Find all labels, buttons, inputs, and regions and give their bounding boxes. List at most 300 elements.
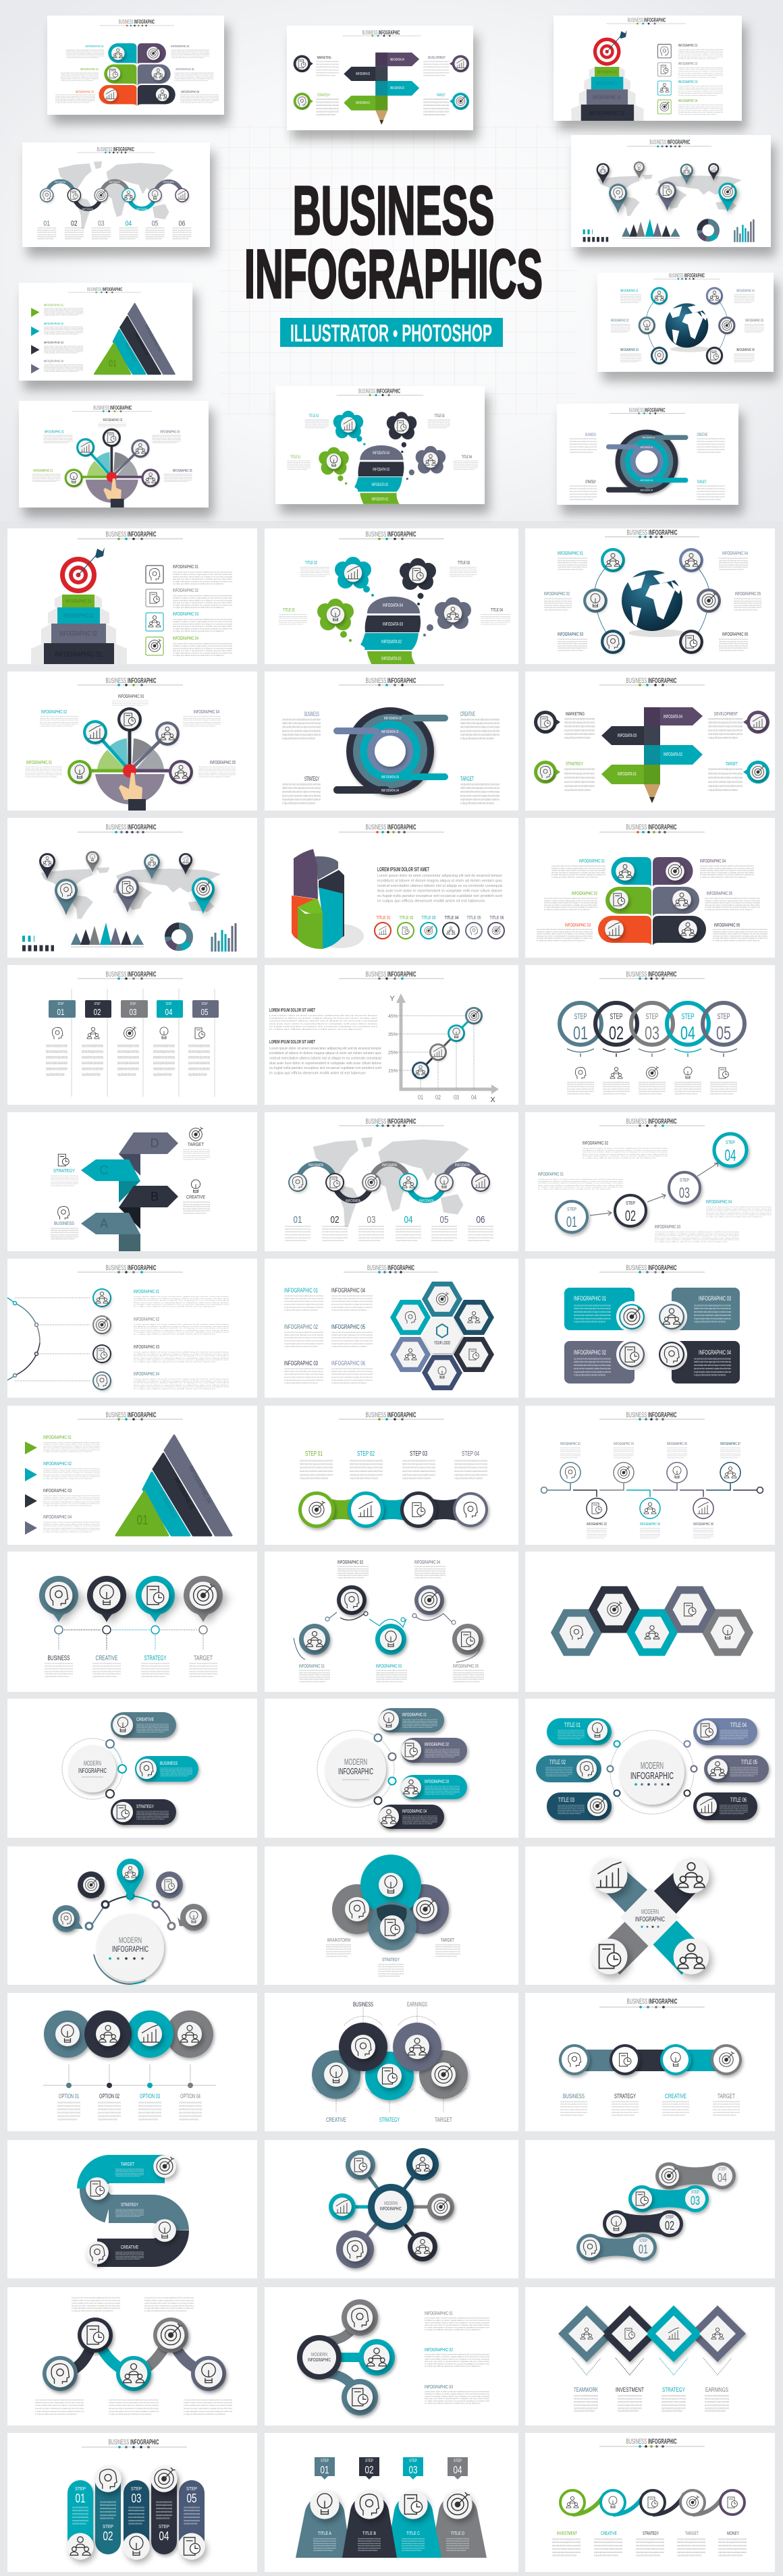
bell text: TITLE C [406,2531,420,2536]
text blocks: CREATIVE [665,2093,686,2100]
pyramid layers: INFOGRAPHIC 03 [173,1477,195,1510]
panel: world wave [265,1112,518,1251]
pills: BUSINESS [160,1761,178,1766]
heading [78,1411,183,1421]
pencil arrows: INFODATA 01 [618,772,637,777]
heading [339,823,444,833]
text blocks: INFOGRAPHIC 04 [43,1515,72,1520]
heading [599,1264,705,1273]
text blocks: INFOGRAPHIC 04 [194,710,219,715]
arrows [81,1132,178,1251]
box text: INFOGRAPHIC 04 [699,1349,731,1356]
icons and text: TARGET [188,1143,205,1147]
text blocks: TARGET [441,1938,455,1943]
text blocks: INVESTMENT [616,2386,644,2393]
text blocks [43,1435,100,1533]
hero background [0,0,783,521]
people chart [22,939,54,948]
labels [326,2001,452,2123]
text blocks: INFOGRAPHIC 01 [425,2311,453,2316]
icons and text: STRATEGY [53,1169,75,1174]
text blocks: INFOGRAPHIC 02 [43,1462,72,1467]
dotted ring [317,1730,394,1807]
head bands: INFODATA 01 [381,657,402,661]
pyramid layers: 01 [136,1513,148,1528]
text blocks: STRATEGY [382,1958,400,1963]
heading [599,970,705,980]
capsule labels: 02 [103,2529,113,2543]
heading [599,677,705,686]
text blocks: INFOGRAPHIC 04 [173,636,198,641]
beads [298,1491,488,1528]
swirl tails [572,2494,724,2515]
heading: BUSINESS INFOGRAPHIC [626,1998,678,2006]
text blocks: INFOGRAPHIC 04 [706,1200,732,1205]
step circles: 01 [566,1213,577,1230]
hub [297,2335,342,2380]
bell shapes [296,2490,487,2558]
hexagons [551,1586,753,1656]
central disc: MODERN [119,1936,142,1945]
pill labels: TITLE 01 [564,1722,580,1728]
heading [78,677,183,686]
stairs: INFOGRAPHIC 01 [55,651,102,659]
step boxes: STEP [166,1002,172,1006]
text blocks: INFOGRAPHIC 04 [700,859,726,864]
text blocks: INFOGRAPHIC 03 [376,1664,402,1669]
arrows: C [100,1163,108,1177]
wave labels: INFODATA [455,1163,470,1168]
text blocks: INFOGRAPHIC 07 [720,1442,740,1446]
heading: BUSINESS INFOGRAPHIC [626,1411,677,1419]
step labels [633,2166,732,2257]
line chart: 02 [435,1094,441,1101]
dotted connectors [312,2008,467,2113]
text blocks [544,551,761,651]
capsule labels [72,2487,200,2543]
capsule labels: 03 [131,2492,142,2505]
heading: BUSINESS INFOGRAPHIC [366,823,416,831]
wave [298,1163,481,1201]
text blocks: INFOGRAPHIC 02 [41,710,67,715]
dotted timeline [59,1630,203,1650]
step tags: STEP [321,2459,329,2463]
text blocks: INFOGRAPHIC 02 [338,1560,363,1565]
subtitle banner [280,318,503,347]
ring labels: 04 [680,1022,695,1043]
step labels: STEP [691,2191,699,2195]
timeline nodes [55,1626,207,1634]
ribbon text [115,2162,144,2259]
text blocks: OPTION 04 [180,2093,200,2100]
heading [78,970,183,980]
capsule labels: 01 [76,2492,85,2505]
panel: head with clouds [265,528,518,664]
heading: BUSINESS INFOGRAPHIC [626,1118,677,1126]
pills: CREATIVE [136,1718,154,1722]
panel: S shape [7,2140,257,2278]
icon: hand pressing button [119,764,146,811]
text blocks: INFOGRAPHIC 05 [453,1664,479,1669]
panel: modern hub with three arms [265,2287,518,2426]
slide preview: concentric circle [557,404,738,505]
central disc [69,1745,116,1792]
3D cylinder chart [292,849,364,949]
numbered columns: 01 [293,1214,302,1226]
panel: timeline [525,1406,775,1545]
step labels: STEP [666,2216,674,2220]
text blocks: INFOGRAPHIC 01 [299,1664,325,1669]
panel: arc list [7,1259,257,1398]
arrows: D [150,1136,159,1150]
pencil arrows [601,707,703,803]
subtitle banner: ILLUSTRATOR • PHOTOSHOP [290,319,492,347]
circles [312,2023,468,2100]
heading: BUSINESS INFOGRAPHIC [105,970,157,979]
text blocks: INFOGRAPHIC 02 [587,1523,607,1527]
nodes [374,1734,396,1805]
panel: hand [7,672,257,811]
arc [7,1298,90,1381]
slide preview: pencil [287,26,473,130]
text blocks [538,1141,772,1242]
panel: bells [265,2433,518,2572]
icon row: TITLE 03 [421,916,436,921]
rings [346,707,434,795]
text blocks [173,565,232,657]
panel: capsules [7,2433,257,2572]
heading: BUSINESS INFOGRAPHIC [108,2438,159,2446]
panel: arc of pins [7,1846,257,1985]
pencil arrows: INFODATA 02 [664,752,682,757]
text blocks: INFOGRAPHIC 01 [579,859,605,864]
central disc: INFOGRAPHIC [112,1944,148,1954]
pencil arrows: INFODATA 04 [664,715,682,719]
text blocks: INFOGRAPHIC 05 [331,1323,365,1330]
stairs: INFOGRAPHIC 04 [65,599,91,604]
labels: EARNINGS [407,2001,427,2008]
line chart: 03 [454,1094,459,1101]
text blocks: CREATIVE [601,2531,617,2536]
text blocks: STRATEGY [304,775,319,782]
text blocks: STRATEGY [643,2531,659,2536]
box text: INFOGRAPHIC 03 [699,1295,731,1302]
step tags: 03 [409,2465,418,2476]
icons and text [51,1127,210,1240]
step labels: 03 [691,2194,700,2208]
line chart [388,993,499,1104]
line chart: 45% [388,1014,398,1019]
connectors and icons [567,1049,737,1079]
pill labels [545,1722,758,1814]
arrows [590,1163,718,1215]
pills: STRATEGY [136,1805,154,1809]
capsule labels: STEP [75,2487,86,2492]
timeline discs [560,1462,740,1518]
bars [333,715,448,794]
text blocks: CREATIVE [96,1655,118,1662]
arrows: B [151,1190,159,1203]
central disc: MODERN [641,1760,664,1772]
hexagons [390,1282,494,1390]
step boxes [49,1000,219,1018]
bars: INFODATA 01 [381,730,399,734]
center label [635,1909,665,1927]
text blocks: CREATIVE [460,711,475,717]
pill labels: TITLE 03 [558,1797,574,1803]
numbered columns: 03 [367,1214,375,1226]
heading: BUSINESS INFOGRAPHIC [626,677,677,685]
panel: target stairs [7,528,257,664]
step circles: 04 [725,1147,736,1165]
text blocks: TARGET [460,775,474,782]
panel: cylinder [265,818,518,958]
text block [377,867,502,903]
wave labels: INFODATA [346,1199,361,1203]
heading [339,530,444,540]
hub [368,2184,414,2230]
text blocks: LOREM IPSUM DOLOR SIT AMET [269,1040,315,1045]
panel: X shape [525,1846,775,1985]
line chart: Y [389,995,395,1003]
heading: BUSINESS INFOGRAPHIC [366,1411,416,1419]
heading: BUSINESS INFOGRAPHIC [366,970,416,979]
step boxes: 03 [130,1007,136,1017]
text blocks [134,1290,229,1390]
petals [598,857,706,946]
arrows: A [100,1217,108,1230]
pyramid layers: INFOGRAPHIC 02 [159,1491,177,1519]
panel: swirl [525,2433,775,2572]
step circles: STEP [626,1201,635,1206]
step boxes: STEP [94,1002,101,1006]
wave labels: INFODATA [419,1199,435,1203]
text blocks: TARGET [726,762,738,767]
text blocks: INFOGRAPHIC 04 [414,1560,440,1565]
labels: BUSINESS [353,2001,373,2008]
heading [599,1411,705,1421]
head bands [360,597,421,664]
spokes and discs [68,707,193,784]
heading [599,2438,705,2448]
panel: overlapping circles [265,1846,518,1985]
step boxes: 02 [93,1007,101,1017]
step tags [315,2457,468,2479]
heading: BUSINESS INFOGRAPHIC [626,529,678,537]
panel: rising steps [525,1112,775,1251]
map pins [39,851,215,915]
panel: hexagon cluster [265,1259,518,1398]
text blocks: INFOGRAPHIC 06 [693,1523,713,1527]
ring labels: STEP [574,1012,587,1021]
panel: five overlapping circles [265,1993,518,2131]
discs [583,548,721,654]
central disc [97,1914,164,1981]
text blocks: INFOGRAPHIC 03 [134,1345,159,1350]
numbered columns: 02 [331,1214,339,1226]
text blocks [57,2093,202,2120]
text blocks: STRATEGY [614,2093,636,2100]
discs [92,1288,111,1390]
icon row: TITLE 04 [444,916,459,921]
text blocks: BUSINESS [304,711,319,717]
text blocks: INFOGRAPHIC 04 [640,1523,660,1527]
center label: MODERN [641,1909,659,1916]
heading [339,1411,444,1421]
connectors [294,1612,481,1662]
text blocks: TARGET [718,2093,735,2100]
labels: CREATIVE [326,2116,346,2123]
text blocks: MARKETING [566,712,585,717]
bars: INFODATA 02 [384,717,402,721]
step tags: 01 [320,2465,329,2476]
text blocks: INFOGRAPHIC 01 [284,1287,318,1294]
step circles: STEP [680,1178,689,1183]
ribbon text: CREATIVE [121,2245,138,2250]
icon row: TITLE 06 [490,916,504,921]
text blocks: LOREM IPSUM DOLOR SIT AMET [269,1008,315,1013]
step labels: 02 [665,2219,674,2232]
step circles: STEP [567,1207,576,1212]
line chart: 25% [388,1051,398,1056]
heading: BUSINESS INFOGRAPHIC [105,1264,157,1272]
bars: INFODATA 03 [381,775,399,779]
box text [574,1295,731,1377]
text blocks: INFOGRAPHIC 02 [425,2348,453,2353]
panel: growth chart [265,965,518,1105]
text blocks: BUSINESS [563,2093,585,2100]
pencil arrows: INFODATA 03 [618,734,637,738]
heading: BUSINESS INFOGRAPHIC [366,1118,416,1126]
icon row: TITLE 05 [467,916,481,921]
pills: INFOGRAPHIC 04 [402,1809,427,1814]
panel: world pins [7,818,257,958]
stairs: INFOGRAPHIC 03 [63,613,93,619]
text blocks: INFOGRAPHIC 03 [425,2385,453,2390]
text blocks: INFOGRAPHIC 03 [284,1360,318,1367]
text blocks [45,1655,217,1678]
head bands: INFODATA 03 [383,622,403,627]
panel: globe [525,528,775,664]
text blocks: STRATEGY [662,2386,685,2393]
arrows [25,1442,37,1535]
text blocks: STEP 04 [462,1450,479,1458]
text blocks: INFOGRAPHIC 03 [118,694,144,699]
heading [78,823,183,833]
text blocks: INFOGRAPHIC 01 [558,551,583,556]
capsule labels: 05 [186,2492,197,2505]
central disc [620,1740,684,1805]
head bands: INFODATA 04 [383,603,403,608]
text blocks: INFOGRAPHIC 04 [331,1287,365,1294]
icons and text: BUSINESS [54,1222,74,1226]
text blocks [537,859,767,941]
clouds [317,557,471,642]
text blocks: INFOGRAPHIC 02 [572,892,597,896]
discs [592,1858,709,1974]
heading: BUSINESS INFOGRAPHIC [626,2438,677,2446]
text blocks [25,694,236,777]
panel: A-D arrows [7,1112,257,1251]
stairs: INFOGRAPHIC 02 [59,630,97,638]
panel: rounded boxes [525,1259,775,1398]
pill labels: TITLE 02 [549,1759,566,1765]
heading [599,1998,705,2008]
dotted ring [610,1730,694,1814]
text blocks: INFOGRAPHIC 01 [538,1172,564,1177]
text blocks: TEAMWORK [574,2386,598,2393]
connectors [60,2335,209,2374]
text blocks: INFOGRAPHIC 03 [655,1225,680,1230]
icon: target [60,547,105,593]
pills [536,1718,769,1820]
bell text [313,2531,469,2552]
heading [339,1118,444,1127]
nodes [86,1892,175,1929]
text blocks [269,1008,381,1075]
discs [288,1173,490,1192]
text blocks: INFOGRAPHIC 01 [26,761,52,765]
pin discs [534,711,770,784]
text blocks [279,561,510,625]
hub: MODERN [311,2353,327,2357]
wave labels [308,1163,470,1203]
panel: modern four pills [265,1699,518,1838]
text blocks [560,2093,740,2116]
wave labels: INFODATA [308,1163,324,1168]
bands [598,1865,703,1975]
step boxes: STEP [58,1002,64,1006]
text blocks: INFOGRAPHIC 05 [735,592,761,597]
head bands: INFODATA 02 [381,640,402,645]
hexagons: YOUR LOGO [434,1341,450,1346]
text blocks: INFOGRAPHIC 01 [560,1442,580,1446]
heading [599,823,705,833]
ring labels: 03 [645,1022,659,1043]
step labels: STEP [639,2239,647,2243]
text blocks: STRATEGY [144,1655,167,1662]
panel: chain wave [7,2287,257,2426]
panel: step dumbbells [525,2140,775,2278]
step circles: STEP [726,1141,735,1145]
text blocks: INFOGRAPHIC 04 [722,551,748,556]
step circles [556,1134,747,1232]
center label: INFOGRAPHIC [635,1916,665,1923]
slide preview: target stairs [554,16,742,121]
hub: MODERN [384,2201,398,2206]
text blocks: INFOGRAPHIC 05 [667,1442,687,1446]
text blocks: EARNINGS [705,2386,728,2393]
pyramid layers [116,1435,232,1535]
text blocks [574,2386,729,2413]
box text: INFOGRAPHIC 01 [574,1295,606,1302]
text blocks [46,1044,210,1077]
diamonds [558,2305,746,2362]
text blocks: INFOGRAPHIC 03 [173,612,198,617]
capsule labels: 04 [159,2529,169,2543]
ring labels: STEP [717,1012,730,1021]
line chart: 15% [388,1069,398,1074]
step labels: 01 [639,2243,648,2256]
rings [560,1003,745,1045]
triangle chart [71,923,144,947]
text blocks: INFOGRAPHIC 06 [714,923,740,928]
S ribbon [91,2169,175,2253]
text blocks: INFOGRAPHIC 03 [565,923,591,928]
heading: BUSINESS INFOGRAPHIC [105,530,157,539]
capsule labels: STEP [159,2525,169,2529]
world map [313,1137,469,1227]
